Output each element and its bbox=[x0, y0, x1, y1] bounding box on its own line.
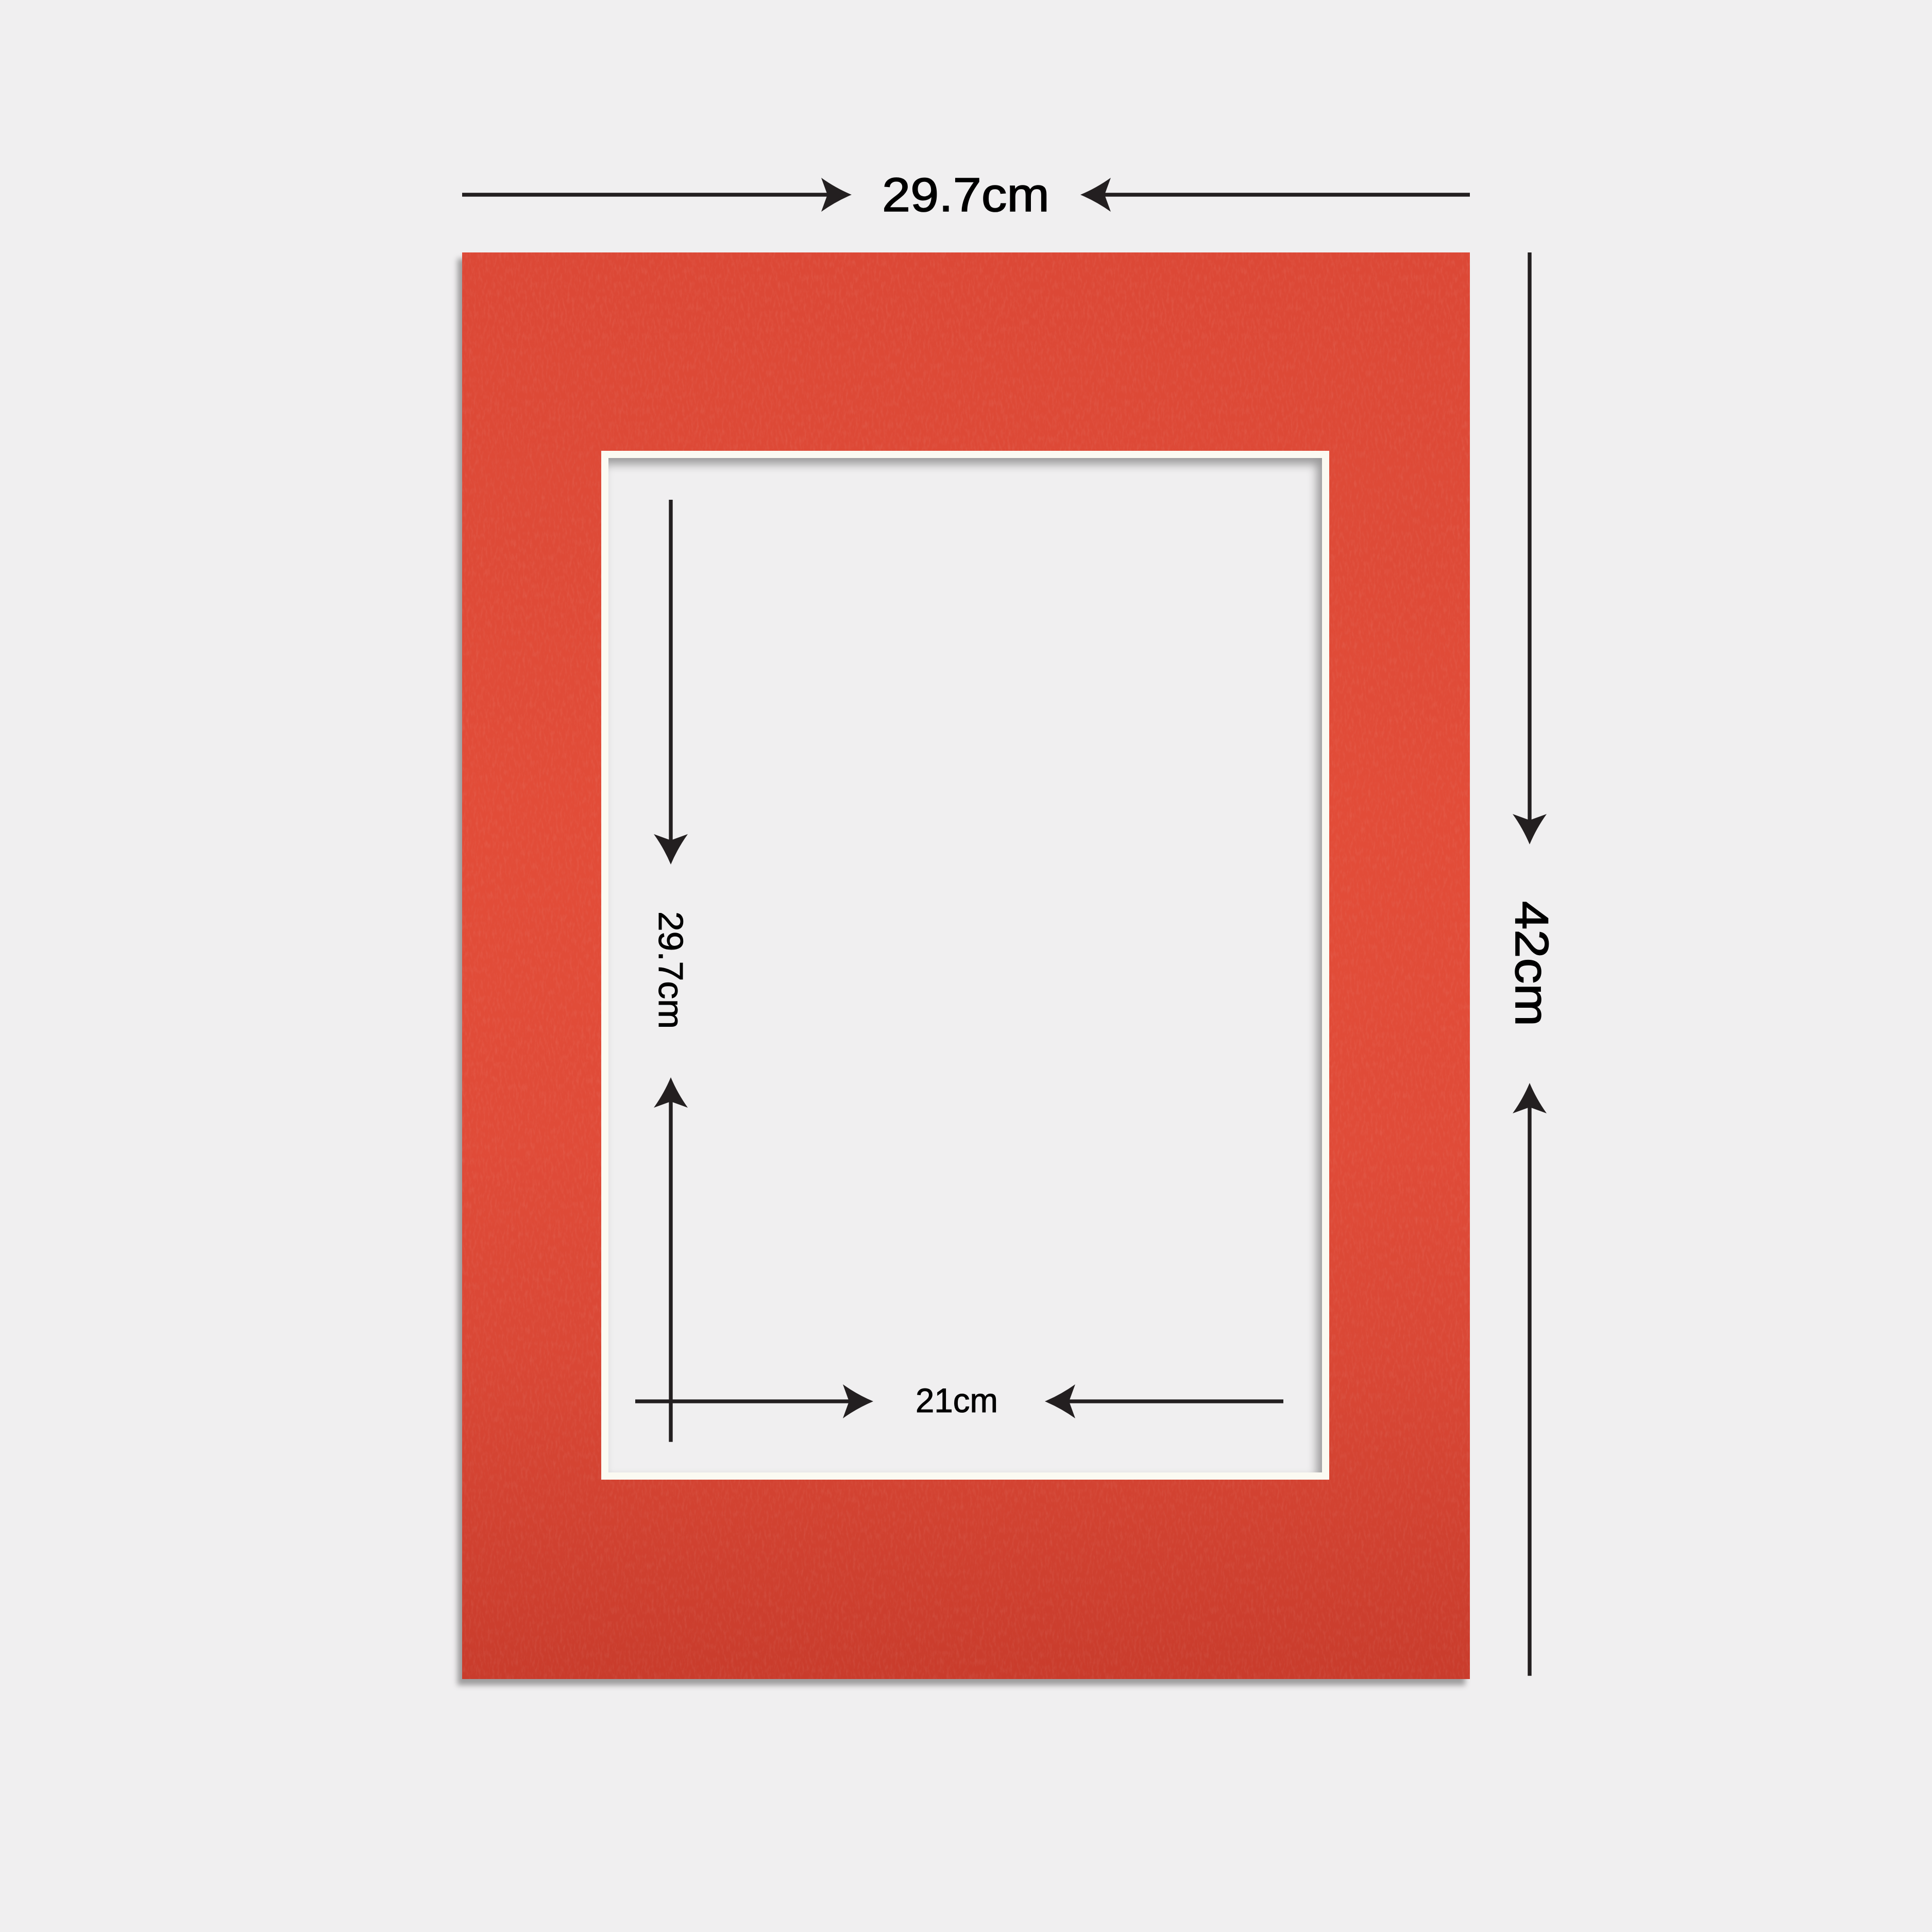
paper texture on mount board bbox=[462, 252, 1470, 1679]
arrow: outer width, right bbox=[1080, 178, 1470, 212]
label: window height 29.7cm: 29.7cm bbox=[651, 911, 690, 1029]
label: window width 21cm: 21cm bbox=[916, 1381, 998, 1419]
arrow: outer height, bottom bbox=[1513, 1083, 1547, 1676]
panel: red mount board bbox=[462, 252, 1470, 1679]
arrow: window height, top bbox=[654, 500, 688, 865]
arrow: outer width, left bbox=[462, 178, 852, 212]
label: outer height 42cm: 42cm bbox=[1505, 901, 1557, 1026]
arrow: window width, right bbox=[1045, 1384, 1283, 1418]
arrow: window width, left bbox=[635, 1384, 873, 1418]
window opening with inner shadow bbox=[608, 458, 1322, 1472]
cream bevel of window bbox=[601, 451, 1329, 1480]
label: outer width 29.7cm: 29.7cm bbox=[882, 168, 1049, 222]
arrow: outer height, top bbox=[1513, 252, 1547, 844]
arrow: window height, bottom bbox=[654, 1077, 688, 1442]
